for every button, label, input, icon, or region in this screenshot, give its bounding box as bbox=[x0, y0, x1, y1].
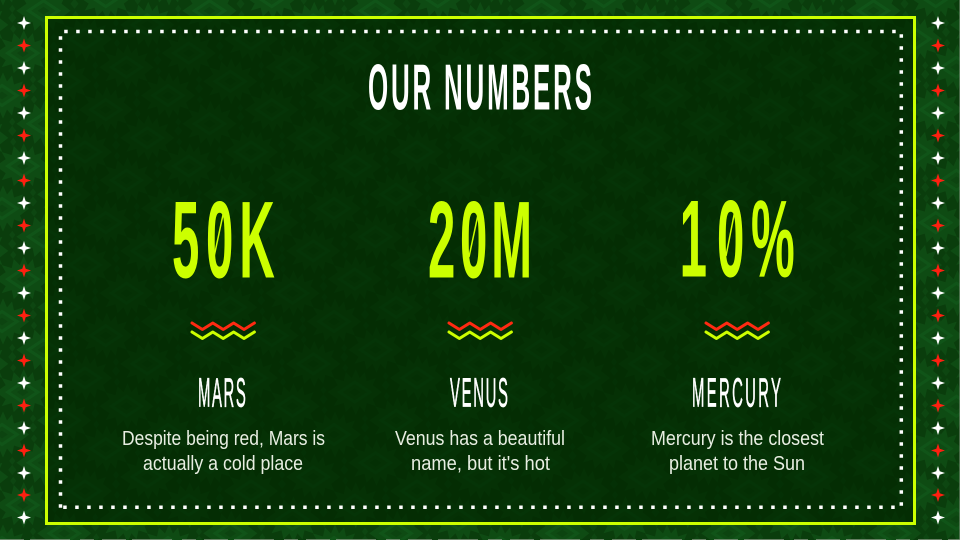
text block: Venus description bbox=[395, 428, 565, 475]
number: 50K: 50K bbox=[172, 179, 275, 302]
left star column bbox=[17, 16, 31, 524]
text block: Mercury description: Mercury is the closest bbox=[651, 428, 824, 450]
icon: zigzag divider bbox=[192, 323, 254, 338]
number: 20M: 20M bbox=[428, 179, 532, 302]
text block: Venus description: name, but it's hot bbox=[411, 453, 550, 475]
icon: zigzag divider bbox=[706, 323, 768, 338]
right edge strip bbox=[958, 0, 960, 540]
bottom edge strip bbox=[0, 538, 960, 540]
text block: Mars description bbox=[122, 428, 325, 475]
heading: Mars: MARS bbox=[198, 369, 246, 416]
text block: Mercury description: planet to the Sun bbox=[669, 453, 805, 475]
title: OUR NUMBERS bbox=[368, 52, 592, 124]
panel: Venus stat bbox=[395, 179, 565, 475]
text block: Venus description: Venus has a beautiful bbox=[395, 428, 565, 450]
icon: zigzag divider bbox=[449, 323, 511, 338]
heading: Mercury: MERCURY bbox=[692, 369, 781, 416]
heading: Venus: VENUS bbox=[450, 369, 508, 416]
text block: Mars description: Despite being red, Mars is bbox=[122, 428, 325, 450]
right star column bbox=[931, 16, 945, 524]
number: 10%: 10% bbox=[680, 178, 795, 301]
dotted border bbox=[60, 32, 901, 508]
text block: Mars description: actually a cold place bbox=[143, 453, 303, 475]
text block: Mercury description bbox=[651, 428, 824, 475]
panel: Mercury stat bbox=[651, 178, 824, 475]
panel: Mars stat bbox=[122, 179, 325, 475]
